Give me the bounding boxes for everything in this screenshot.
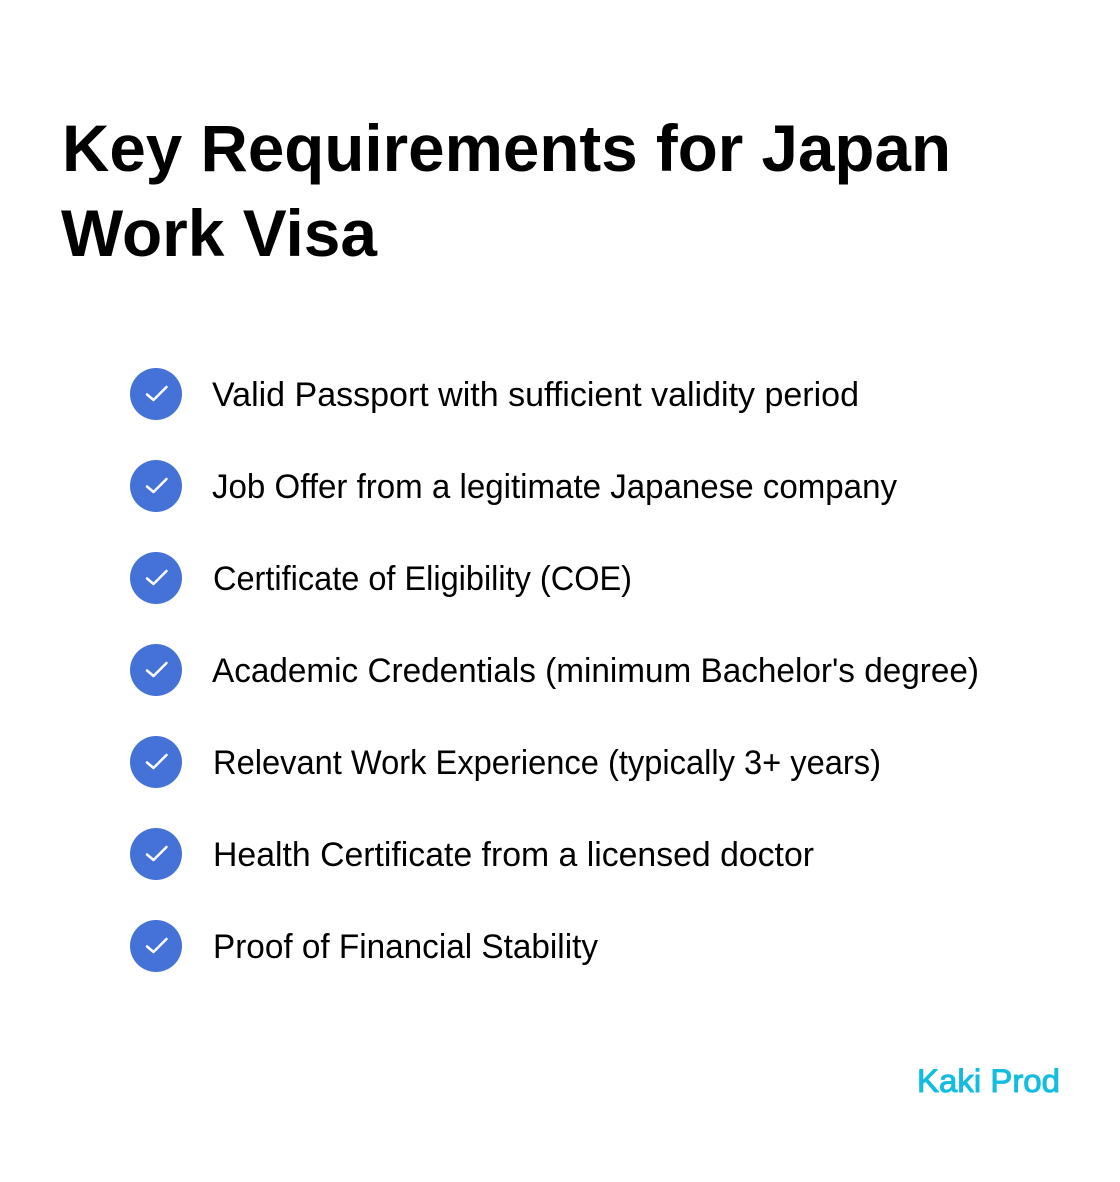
logo: Kaki Prod: Kaki Prod [917,1063,1060,1099]
item: academic credentials [130,644,979,696]
item: job offer: Job Offer from a legitimate Japanese company [212,468,897,506]
item: certificate of eligibility [130,552,632,604]
item: job offer [130,460,897,512]
item: health certificate [130,828,814,880]
title: Work Visa [61,196,378,270]
item: academic credentials: Academic Credentials (minimum Bachelor's degree) [212,652,979,690]
item: valid passport [130,368,859,420]
title: Key Requirements for Japan [62,111,951,185]
checklist [130,368,979,972]
item: financial stability [130,920,598,972]
item: work experience [130,736,881,788]
item: certificate of eligibility: Certificate of Eligibility (COE) [213,560,632,598]
item: work experience: Relevant Work Experience (typically 3+ years) [213,744,881,782]
item: health certificate: Health Certificate from a licensed doctor [213,836,814,874]
item: valid passport: Valid Passport with sufficient validity period [212,376,859,414]
title [61,111,951,270]
item: financial stability: Proof of Financial Stability [213,928,598,966]
